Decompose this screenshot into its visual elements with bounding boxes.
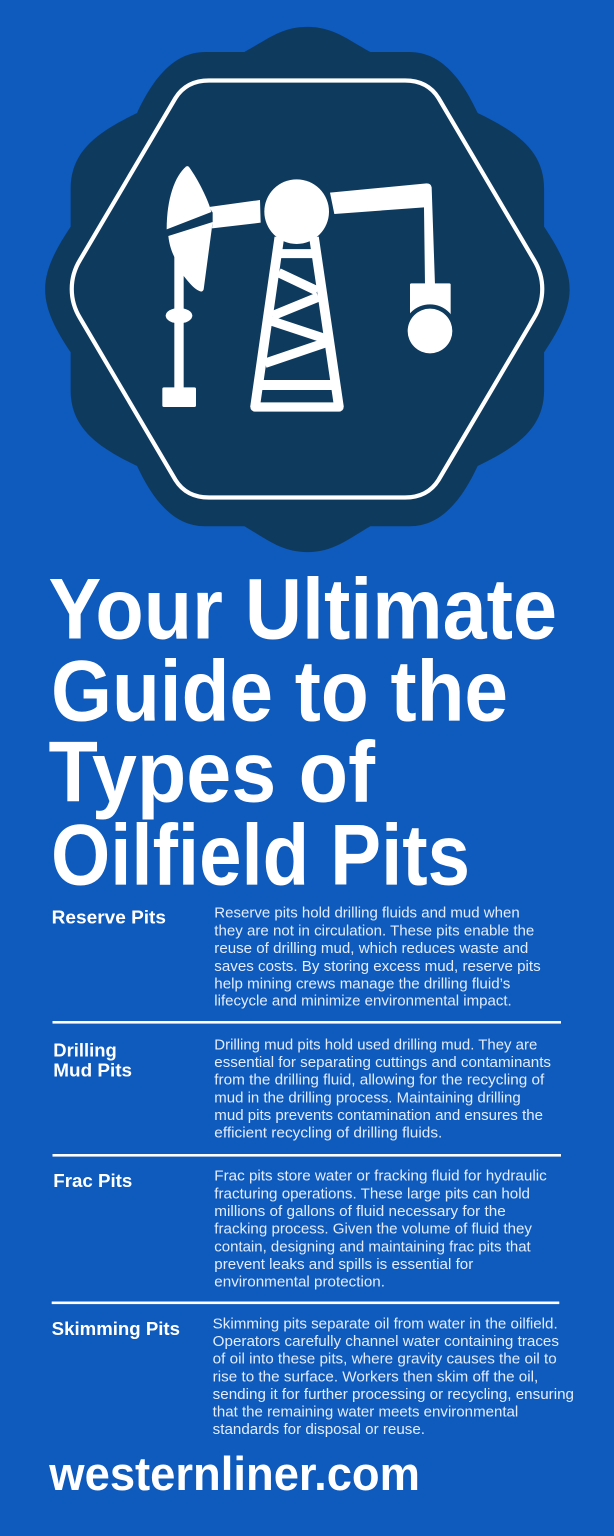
section: frac pits xyxy=(53,1169,547,1291)
text: frac pits description: fracturing operations. These large pits can hold xyxy=(214,1186,530,1202)
icon: oil pump jack xyxy=(162,166,457,407)
text: drilling mud pits description: mud in the drilling process. Maintaining drilling xyxy=(214,1090,521,1106)
badge: scalloped background xyxy=(45,27,570,552)
section: reserve pits xyxy=(52,906,541,1010)
text: frac pits description: contain, designing and maintaining frac pits that xyxy=(214,1239,531,1255)
section: skimming pits xyxy=(52,1316,574,1438)
text: skimming pits description: Skimming pits separate oil from water in the oilfield. xyxy=(213,1316,558,1332)
heading: drilling mud pits: Mud Pits xyxy=(53,1060,132,1081)
text: drilling mud pits description: efficient recycling of drilling fluids. xyxy=(214,1126,442,1142)
heading: drilling mud pits: Drilling xyxy=(53,1040,117,1061)
text: drilling mud pits description: mud pits prevents contamination and ensures the xyxy=(214,1108,543,1124)
heading: reserve pits: Reserve Pits xyxy=(52,906,166,927)
text: reserve pits description: Reserve pits hold drilling fluids and mud when xyxy=(214,906,520,922)
text: frac pits description: prevent leaks and spills is essential for xyxy=(214,1257,473,1273)
badge: pump jack emblem xyxy=(45,27,570,552)
text: skimming pits description xyxy=(213,1316,574,1438)
title: Oilfield Pits xyxy=(51,808,470,904)
text: drilling mud pits description xyxy=(214,1037,551,1142)
text: skimming pits description: of oil into these pits, where gravity causes the oil to xyxy=(213,1352,557,1368)
badge: hexagon outline xyxy=(72,80,542,498)
text: skimming pits description: Operators carefully channel water containing traces xyxy=(213,1334,559,1350)
text: skimming pits description: rise to the surface. Workers then skim off the oil, xyxy=(213,1369,538,1385)
text: skimming pits description: sending it for further processing or recycling, ensuring xyxy=(213,1387,574,1403)
title: Guide to the xyxy=(51,644,508,740)
pump: derrick tower xyxy=(255,237,339,407)
pump: polished rod and base xyxy=(162,257,196,407)
text: reserve pits description: help mining crews manage the drilling fluid’s xyxy=(214,976,510,992)
text: reserve pits description: saves costs. By storing excess mud, reserve pits xyxy=(214,959,541,975)
text: frac pits description: fracking process. Given the volume of fluid they xyxy=(214,1222,533,1238)
heading: frac pits: Frac Pits xyxy=(53,1170,132,1191)
heading: drilling mud pits xyxy=(53,1040,132,1081)
pump: central bearing xyxy=(264,179,329,244)
text: frac pits description: environmental protection. xyxy=(214,1275,385,1291)
text: frac pits description: Frac pits store water or fracking fluid for hydraulic xyxy=(214,1169,547,1185)
text: drilling mud pits description: essential for separating cuttings and contaminants xyxy=(214,1055,551,1071)
pump: counterweight xyxy=(403,283,457,358)
text: reserve pits description: reuse of drilling mud, which reduces waste and xyxy=(214,941,528,957)
text: reserve pits description: they are not in circulation. These pits enable the xyxy=(214,923,534,939)
text: drilling mud pits description: Drilling mud pits hold used drilling mud. They are xyxy=(214,1037,537,1053)
heading: skimming pits: Skimming Pits xyxy=(52,1318,180,1339)
text: reserve pits description xyxy=(214,906,541,1010)
text: skimming pits description: that the remaining water meets environmental xyxy=(213,1405,518,1421)
text: drilling mud pits description: from the drilling fluid, allowing for the recycling of xyxy=(214,1073,545,1089)
section: drilling mud pits xyxy=(53,1037,551,1142)
footer: website url: westernliner.com xyxy=(48,1447,420,1500)
text: frac pits description xyxy=(214,1169,547,1291)
text: skimming pits description: standards for disposal or reuse. xyxy=(213,1422,425,1438)
pump: horsehead xyxy=(167,166,213,292)
pump: walking beam xyxy=(209,183,435,285)
title: Your Ultimate xyxy=(48,561,557,657)
title: Types of xyxy=(48,725,375,821)
text: frac pits description: millions of gallons of fluid necessary for the xyxy=(214,1204,506,1220)
title xyxy=(48,561,557,904)
text: reserve pits description: lifecycle and minimize environmental impact. xyxy=(214,994,512,1010)
